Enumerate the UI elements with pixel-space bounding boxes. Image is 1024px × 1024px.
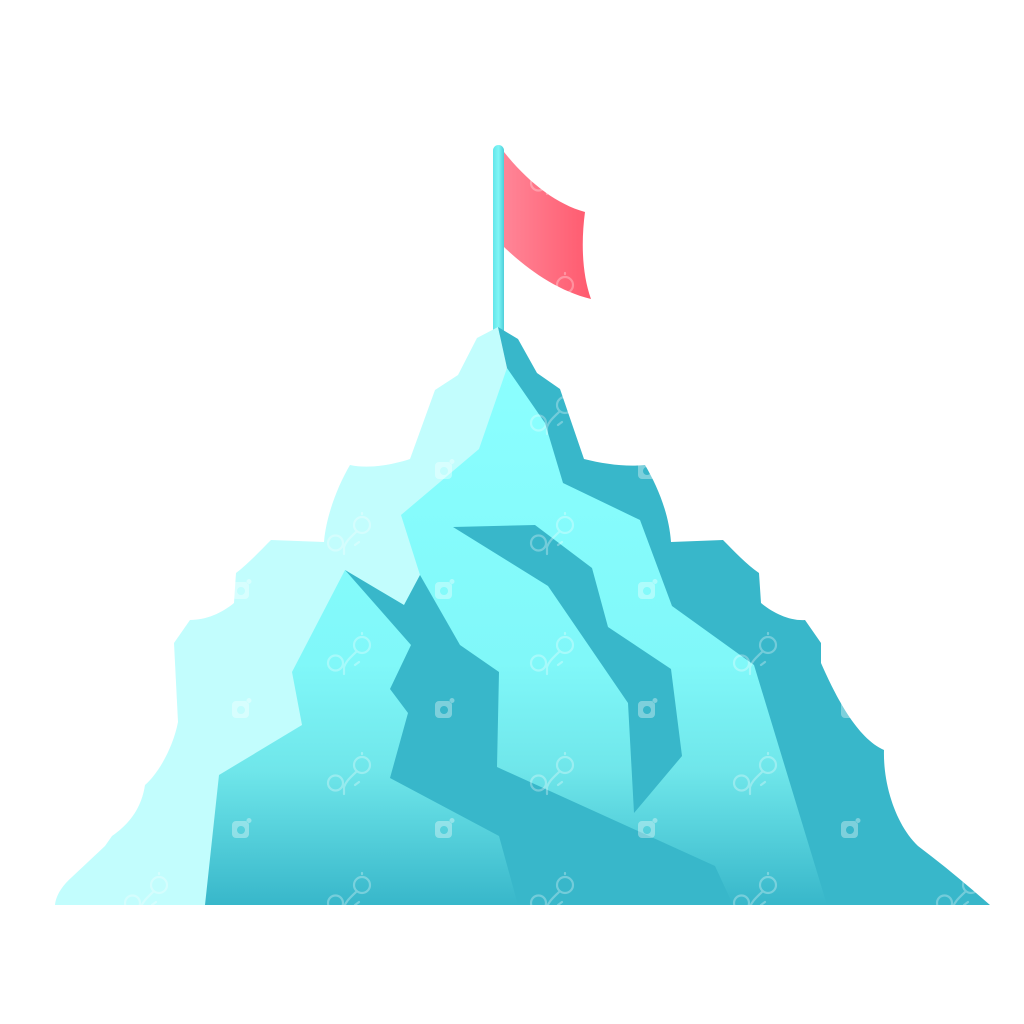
watermark: small square logos (232, 459, 861, 838)
watermark: script marks (125, 153, 979, 914)
mountain: dark right side (205, 327, 990, 905)
flag cloth (504, 152, 591, 299)
crevice: lower dark ridge (345, 570, 733, 905)
flag pole (493, 145, 504, 335)
mountain: light left side (55, 327, 520, 905)
crevice: central dark ridge (453, 525, 682, 813)
mountain: bright gradient face (205, 368, 827, 905)
